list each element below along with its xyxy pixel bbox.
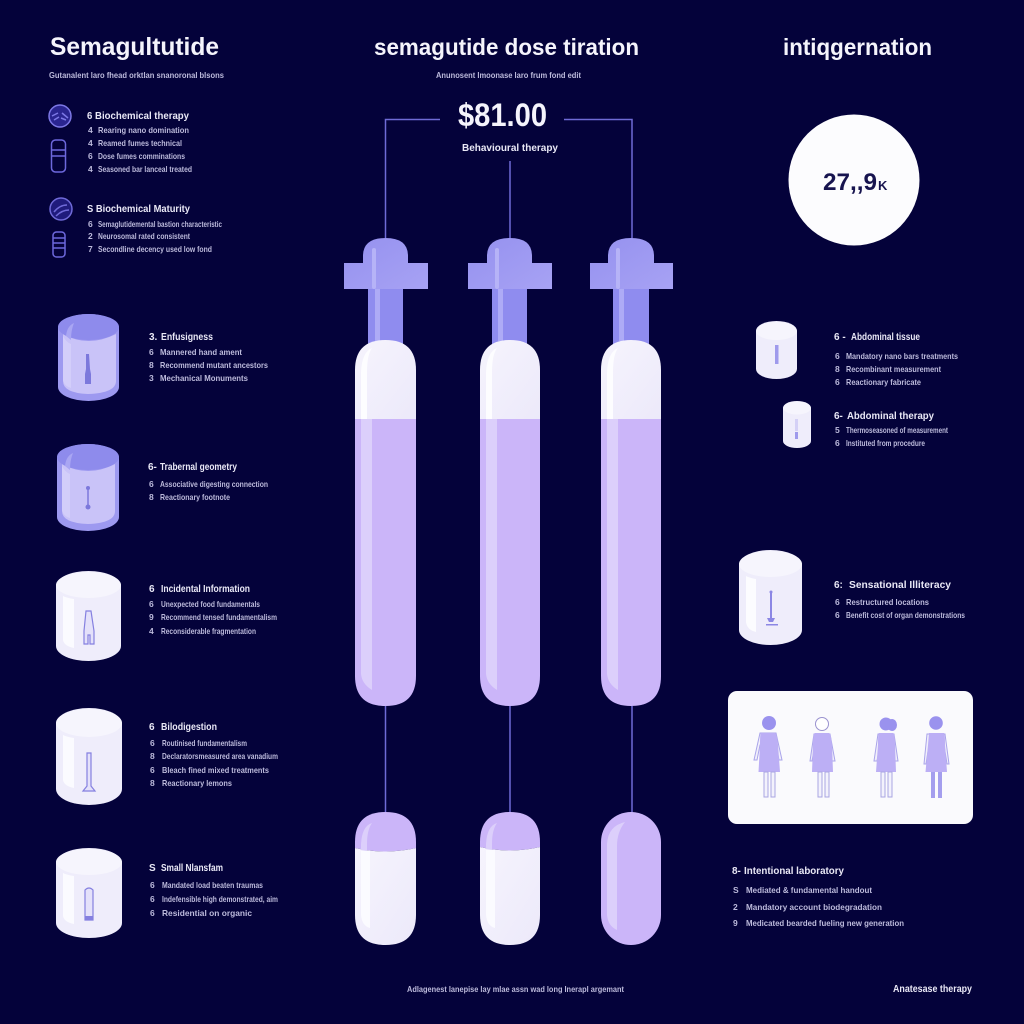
text: right three: 6 — [835, 610, 840, 620]
bullet list: 6 — [88, 151, 93, 161]
heading: 6 Biochemical therapy — [87, 111, 189, 122]
text: white four: 6 — [149, 722, 155, 733]
text: right one: 6 - — [834, 332, 846, 343]
bullet list: Rearing nano domination — [98, 125, 189, 135]
text: purple one: 8 — [149, 360, 154, 370]
text: white five: Indefensible high demonstrated, aim — [162, 894, 278, 904]
text: right one — [834, 332, 958, 387]
text: white five: Small Nlansfam — [161, 863, 223, 874]
subtitle: center: Anunosent Imoonase laro frum fond edit — [436, 70, 581, 80]
text: white five: Mandated load beaten traumas — [162, 880, 263, 890]
text: bottom right block: S — [733, 885, 739, 895]
bullet list: 6 — [88, 219, 93, 229]
text: white three: Reconsiderable fragmentation — [161, 626, 256, 636]
cylinder: white three — [56, 571, 121, 661]
text: white five — [149, 863, 278, 918]
text: white four: Bilodigestion — [161, 722, 217, 733]
text: purple two: Reactionary footnote — [160, 492, 230, 502]
subtitle: left: Gutanalent laro fhead orktlan snanoronal blsons — [49, 70, 224, 80]
text: white three: Recommend tensed fundamentalism — [161, 612, 277, 622]
text: white four: 8 — [150, 751, 155, 761]
bullet list: 7 — [88, 244, 93, 254]
bullet list — [88, 125, 192, 174]
text: bottom right block — [732, 866, 904, 928]
text: purple two: 6- — [148, 462, 157, 473]
text: white four — [149, 722, 278, 788]
bullet list: Dose fumes comminations — [98, 151, 185, 161]
text: white five: S — [149, 863, 156, 874]
syringe: middle — [468, 238, 552, 706]
bullet list: 4 — [88, 164, 93, 174]
cylinder: right one — [756, 321, 797, 379]
capsule: middle — [480, 812, 540, 945]
text: white three: 9 — [149, 612, 154, 622]
connector lines: bottom — [386, 706, 632, 813]
bullet list: Reamed fumes technical — [98, 138, 182, 148]
text: white three: 6 — [149, 599, 154, 609]
text: right two: Instituted from procedure — [846, 438, 925, 448]
text: purple two: Associative digesting connection — [160, 479, 268, 489]
text: right two: Thermoseasoned of measurement — [846, 425, 948, 435]
stat circle — [788, 114, 920, 246]
syringe: left — [344, 238, 428, 706]
text: white four: Reactionary lemons — [162, 778, 232, 788]
panel: left top list one — [49, 105, 192, 174]
icon: small vial — [53, 232, 65, 257]
cylinder: purple one — [58, 314, 119, 401]
heading: S Biochemical Maturity — [87, 204, 190, 215]
text: purple one: 3. — [149, 332, 158, 343]
text: right three: Sensational Illiteracy — [849, 580, 951, 591]
text: bottom right block: 2 — [733, 902, 738, 912]
text: purple two — [148, 462, 268, 502]
cylinder: right three — [739, 550, 802, 645]
text: bottom right block: 9 — [733, 918, 738, 928]
text: bottom right block: Mediated & fundamental handout — [746, 885, 872, 895]
text: white four: 6 — [150, 765, 155, 775]
figure: first — [754, 716, 782, 797]
text: bottom right block: Medicated bearded fueling new generation — [746, 918, 904, 928]
text: white five: 6 — [150, 894, 155, 904]
bullet list: Semaglutidemental bastion characteristic — [98, 219, 222, 229]
text: right one: Recombinant measurement — [846, 364, 941, 374]
bullet list: 4 — [88, 138, 93, 148]
text: right one: 8 — [835, 364, 840, 374]
title: Semaglutide: Semagultutide — [50, 33, 219, 61]
text: right one: 6 — [835, 377, 840, 387]
cylinder: purple two — [57, 444, 119, 531]
text: purple two: 6 — [149, 479, 154, 489]
panel: left top list two — [50, 198, 222, 257]
text: right three: Restructured locations — [846, 597, 929, 607]
figure: second — [810, 718, 835, 797]
footer: right note: Anatesase therapy — [893, 984, 972, 995]
text: white three — [149, 584, 277, 636]
text: right three — [834, 580, 965, 620]
text: right two: 6- — [834, 411, 843, 422]
text: bottom right block: 8- — [732, 866, 741, 877]
text: bottom right block: Intentional laboratory — [744, 866, 844, 877]
text: white four: 6 — [150, 738, 155, 748]
text: purple one: 3 — [149, 373, 154, 383]
bullet list: Seasoned bar lanceal treated — [98, 164, 192, 174]
text: white four: Routinised fundamentalism — [162, 738, 247, 748]
text: right three: 6 — [835, 597, 840, 607]
text: white three: 4 — [149, 626, 154, 636]
label: price: Behavioural therapy — [462, 143, 558, 154]
text: right one: Abdominal tissue — [851, 332, 920, 343]
text: right one: 6 — [835, 351, 840, 361]
text: white four: 8 — [150, 778, 155, 788]
text: right two — [834, 411, 948, 448]
text: white four: Declaratorsmeasured area vanadium — [162, 751, 278, 761]
cylinder: white five — [56, 848, 122, 938]
text: white five: Residential on organic — [162, 908, 252, 918]
text: bottom right block: Mandatory account biodegradation — [746, 902, 882, 912]
value: price: $81.00 — [458, 97, 547, 133]
text: purple one: Enfusigness — [161, 332, 213, 343]
text: white three: Unexpected food fundamentals — [161, 599, 260, 609]
figure: fourth — [924, 716, 949, 798]
text: white three: 6 — [149, 584, 155, 595]
icon: round molecule — [49, 105, 71, 127]
text: white three: Incidental Information — [161, 584, 250, 595]
icon: vial outline — [52, 140, 66, 172]
cylinder: white four — [56, 708, 122, 805]
title: dose titration: semagutide dose tiration — [374, 34, 639, 60]
panel: people — [728, 691, 973, 824]
text: right two: Abdominal therapy — [847, 411, 934, 422]
stat circle: K — [878, 178, 888, 193]
text: purple one: Recommend mutant ancestors — [160, 360, 268, 370]
figure: third — [874, 718, 898, 797]
text: purple one: Mannered hand ament — [160, 347, 242, 357]
text: right one: Mandatory nano bars treatments — [846, 351, 958, 361]
text: purple two: 8 — [149, 492, 154, 502]
text: purple one: Mechanical Monuments — [160, 373, 248, 383]
text: purple one — [149, 332, 268, 383]
text: purple two: Trabernal geometry — [160, 462, 237, 473]
bullet list: Neurosomal rated consistent — [98, 231, 190, 241]
capsule: left — [355, 812, 416, 945]
text: right three: 6: — [834, 580, 843, 591]
text: purple one: 6 — [149, 347, 154, 357]
text: right two: 6 — [835, 438, 840, 448]
bullet list: Secondline decency used low fond — [98, 244, 212, 254]
bullet list: 4 — [88, 125, 93, 135]
text: white five: 6 — [150, 880, 155, 890]
footer: center note: Adlagenest lanepise lay mlae assn wad long Inerapl argemant — [407, 984, 624, 994]
text: right three: Benefit cost of organ demonstrations — [846, 610, 965, 620]
text: right two: 5 — [835, 425, 840, 435]
stat circle: 27,,9 — [823, 169, 877, 196]
bullet list: 2 — [88, 231, 93, 241]
connector lines: top — [386, 120, 632, 240]
icon: round hatch — [50, 198, 72, 220]
text: white five: 6 — [150, 908, 155, 918]
syringe: right — [590, 238, 673, 706]
text: right one: Reactionary fabricate — [846, 377, 921, 387]
capsule: right — [601, 812, 661, 945]
bullet list — [88, 219, 222, 254]
cylinder: right two — [783, 401, 811, 448]
title: integration: intiqgernation — [783, 34, 932, 60]
text: white four: Bleach fined mixed treatments — [162, 765, 269, 775]
